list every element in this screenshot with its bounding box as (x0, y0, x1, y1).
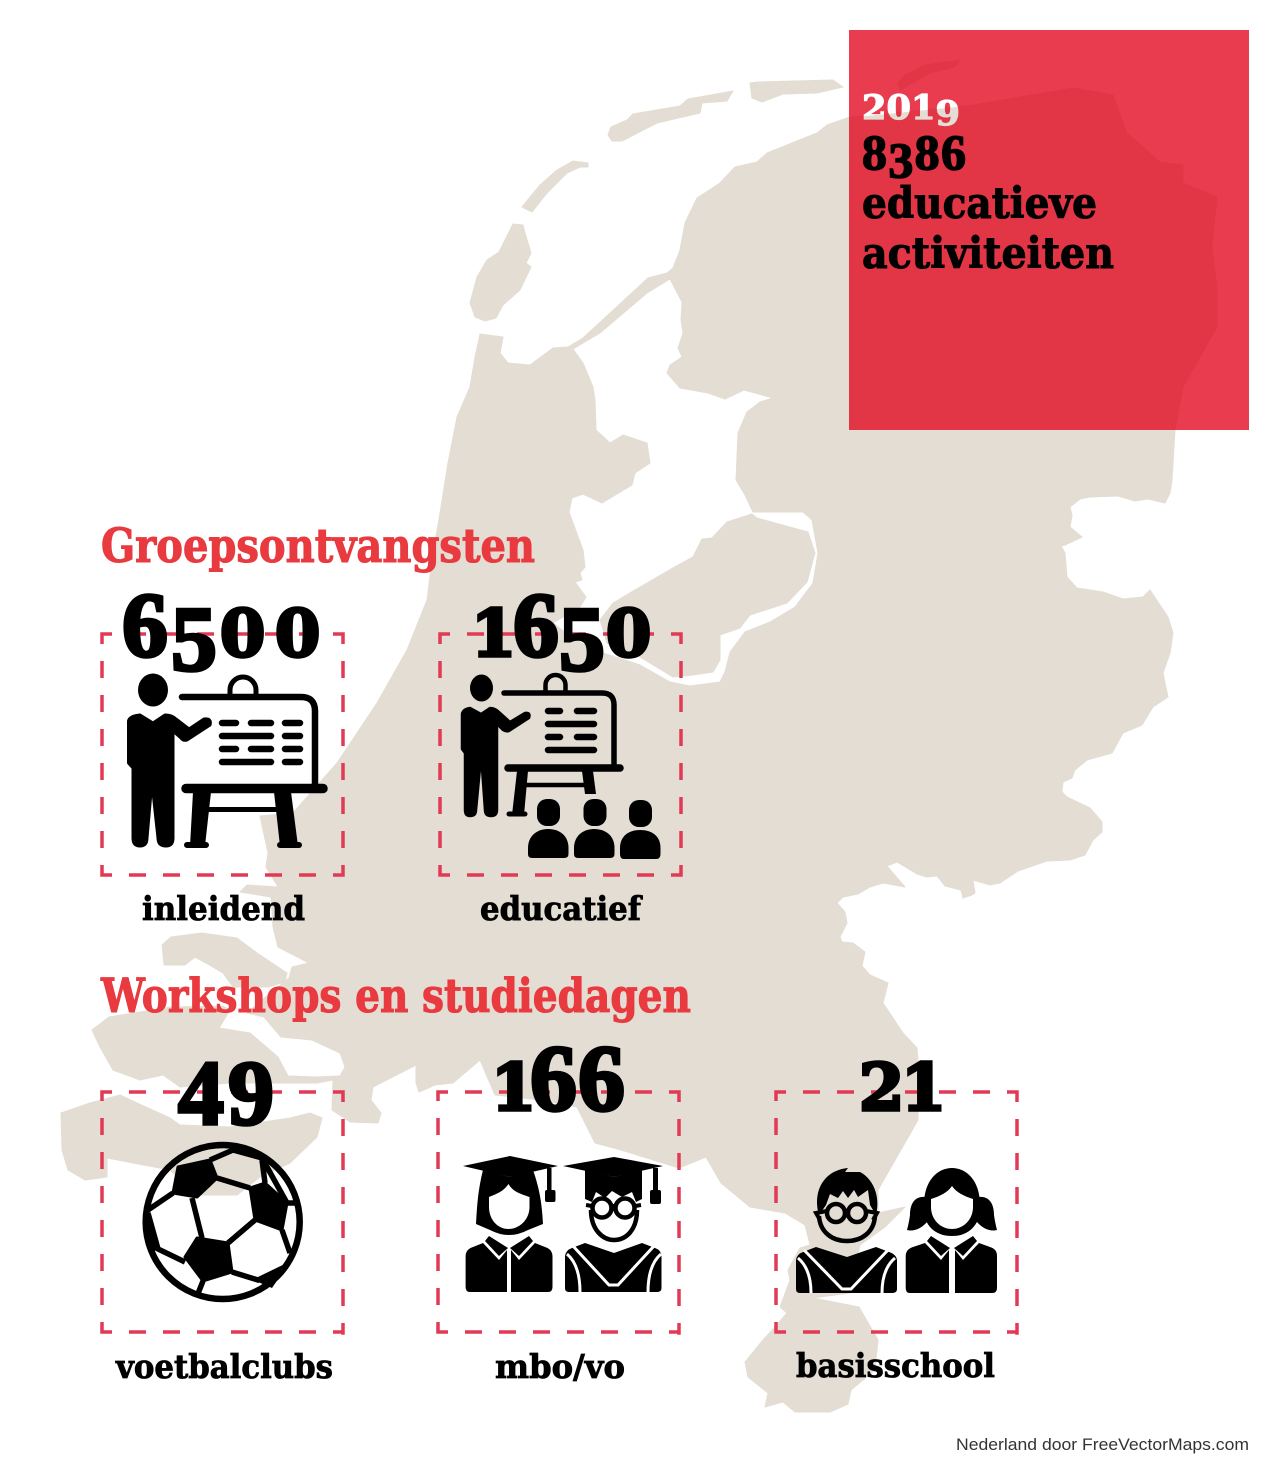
island: Terschelling (608, 91, 733, 141)
icon: presenter with board (128, 674, 323, 846)
dashed frame: inleidend (100, 632, 345, 877)
number 166: 6 (530, 1027, 577, 1131)
number 21: 1 (901, 1050, 946, 1126)
icon: football (146, 1145, 300, 1299)
title number: 8 (862, 124, 887, 180)
number 1650: 1 (471, 596, 516, 672)
heading: Workshops en studiedagen: Workshops en studiedagen (100, 969, 691, 1024)
number 6500: 6 (122, 574, 168, 676)
island: Schiermonnikoog (898, 60, 960, 90)
icon: two school children (796, 1168, 997, 1293)
number 166: 6 (578, 1027, 625, 1131)
title line 1: educatieve (862, 179, 1097, 229)
number 1650: 0 (606, 596, 651, 672)
red title panel (849, 30, 1249, 430)
number 21: 2 (859, 1050, 904, 1126)
number 6500: 0 (275, 596, 320, 672)
label: inleidend: inleidend (142, 889, 305, 928)
dashed frame: basisschool (774, 1090, 1019, 1335)
heading: Groepsontvangsten: Groepsontvangsten (101, 519, 535, 574)
island: Texel (470, 224, 531, 321)
dashed frame: voetbalclubs (100, 1090, 345, 1335)
title line 2: activiteiten (862, 229, 1114, 279)
title number: 86 (915, 124, 966, 180)
icon: two graduates (463, 1156, 663, 1292)
label: basisschool: basisschool (796, 1346, 995, 1385)
title year: 201 (862, 88, 933, 128)
label: mbo/vo: mbo/vo (495, 1347, 625, 1386)
number 6500: 0 (220, 596, 265, 672)
island: Goeree-Overflakkee (162, 933, 287, 987)
dashed frame: mbo/vo (436, 1090, 681, 1335)
dashed frame: educatief (438, 632, 683, 877)
island: Vlieland (522, 161, 588, 212)
number 49: 9 (228, 1042, 274, 1144)
number 1650: 5 (559, 588, 605, 690)
number 49: 4 (178, 1042, 224, 1144)
label: educatief: educatief (480, 889, 643, 928)
number 1650: 6 (513, 574, 559, 676)
title year: 9 (935, 94, 960, 134)
icon: presenter with audience (462, 674, 660, 859)
island: Zeeuws-Vlaanderen (61, 1095, 322, 1195)
label: voetbalclubs: voetbalclubs (115, 1347, 333, 1386)
title number: 3 (888, 132, 913, 188)
island: Ameland (750, 80, 843, 102)
number 6500: 5 (171, 588, 217, 690)
map credit: Nederland door FreeVectorMaps.com (956, 1435, 1249, 1454)
number 166: 1 (491, 1050, 536, 1126)
